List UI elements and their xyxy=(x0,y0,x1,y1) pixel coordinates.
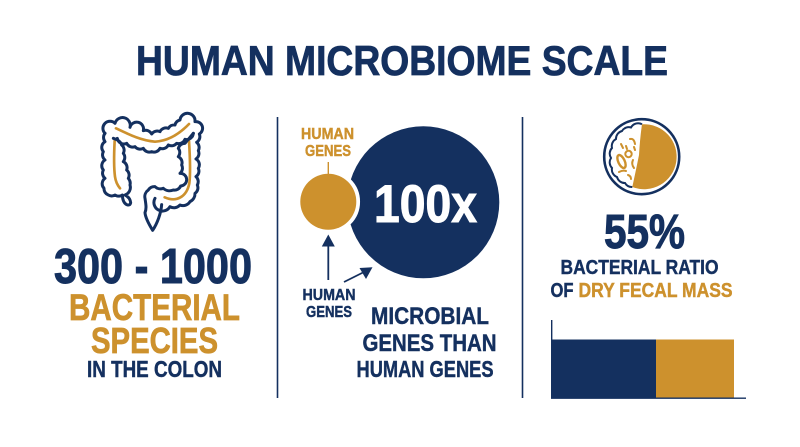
arrow: to microbial circle xyxy=(344,267,372,282)
stat: 55%: 55% xyxy=(604,206,685,259)
circle: human genes xyxy=(300,174,356,230)
label: 100x: 100x xyxy=(374,175,477,234)
icon: colon xyxy=(102,113,203,230)
label: microbial genes than human genes: HUMAN GENES xyxy=(356,356,494,382)
panel: gene comparison xyxy=(300,126,499,382)
label: bacterial: BACTERIAL xyxy=(69,287,240,328)
label: human genes gold: HUMAN xyxy=(301,126,354,143)
label: species: SPECIES xyxy=(91,320,218,361)
label: in the colon: IN THE COLON xyxy=(87,356,222,382)
stat: 300 - 1000: 300 - 1000 xyxy=(54,240,252,294)
label: of dry fecal mass: DRY FECAL MASS xyxy=(578,280,732,302)
panel: fecal mass xyxy=(550,119,746,398)
label: human genes navy: HUMAN xyxy=(302,287,356,304)
arrow: to human circle xyxy=(322,234,335,280)
icon: fecal circle xyxy=(604,119,679,194)
circle: microbial genes xyxy=(347,126,499,278)
bar chart xyxy=(551,320,746,398)
label: microbial genes than human genes: GENES THAN xyxy=(362,330,496,357)
label: bacterial ratio: BACTERIAL RATIO xyxy=(560,257,718,279)
label: of dry fecal mass: OF xyxy=(550,280,574,302)
label: human genes gold: GENES xyxy=(305,143,351,160)
label: human genes navy xyxy=(302,287,356,321)
label: human genes gold xyxy=(301,126,354,160)
label: human genes navy: GENES xyxy=(306,304,352,321)
panel: colon species xyxy=(54,113,252,382)
label: microbial genes than human genes: MICROBIAL xyxy=(371,303,489,330)
label: microbial genes than human genes xyxy=(356,303,496,382)
title: HUMAN MICROBIOME SCALE xyxy=(136,37,668,84)
